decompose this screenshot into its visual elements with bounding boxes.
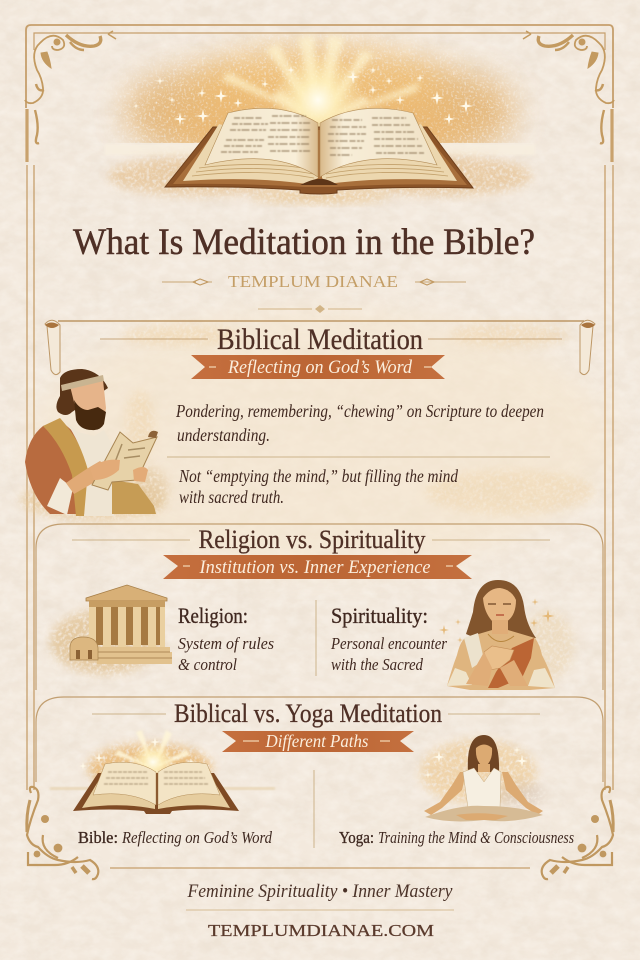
corner ornament: top left xyxy=(25,31,116,143)
title: What Is Meditation in the Bible? xyxy=(73,222,535,263)
scroll xyxy=(92,432,157,490)
body text xyxy=(175,401,544,507)
hair xyxy=(466,580,536,640)
head xyxy=(56,369,108,415)
corner ornament: bottom left xyxy=(27,787,98,879)
robe xyxy=(25,420,155,514)
illustration: temple xyxy=(50,585,172,674)
panel: biblical meditation xyxy=(20,320,595,520)
column: spirituality: with the Sacred xyxy=(331,655,423,674)
body text: Pondering, remembering, “chewing” on Scripture to deepen xyxy=(175,401,544,421)
divider ornament xyxy=(258,305,362,313)
body xyxy=(447,630,555,690)
column: religion: & control xyxy=(178,655,237,674)
panel: biblical vs yoga meditation xyxy=(36,697,603,848)
column: spirituality: Personal encounter xyxy=(330,634,447,653)
website: TEMPLUMDIANAE.COM xyxy=(208,921,434,940)
hero illustration: glowing open book xyxy=(105,36,535,203)
ribbon: Reflecting on God’s Word xyxy=(227,357,412,378)
label: bible: Reflecting on God’s Word xyxy=(121,828,273,847)
label: yoga: Training the Mind & Consciousness xyxy=(378,828,574,847)
body text: Not “emptying the mind,” but filling the mind xyxy=(178,466,459,486)
corner ornament: top right xyxy=(523,31,614,143)
column: religion: Religion: xyxy=(178,603,248,628)
label: yoga: Yoga: xyxy=(339,828,374,847)
subtitle with flourishes xyxy=(162,272,466,291)
tagline: Feminine Spirituality • Inner Mastery xyxy=(187,881,453,902)
heading: Biblical vs. Yoga Meditation xyxy=(174,699,442,728)
scroll header xyxy=(45,320,595,375)
face xyxy=(483,588,516,623)
hands xyxy=(90,460,148,482)
panel: religion vs spirituality xyxy=(36,524,603,690)
body text: with sacred truth. xyxy=(179,487,284,507)
illustration: man reading a scroll xyxy=(20,369,168,520)
ribbon xyxy=(163,555,472,579)
ribbon: Different Paths xyxy=(265,731,368,751)
column: spirituality: Spirituality: xyxy=(331,603,428,628)
illustration: small open book xyxy=(50,730,275,814)
ribbon: Institution vs. Inner Experience xyxy=(199,557,430,578)
column: religion xyxy=(178,603,274,674)
heading: Religion vs. Spirituality xyxy=(198,525,426,554)
illustration: yoga meditation xyxy=(420,735,544,821)
heading: Biblical Meditation xyxy=(217,323,423,356)
body text: understanding. xyxy=(177,425,270,445)
ribbon xyxy=(222,731,414,752)
subtitle with flourishes: TEMPLUM DIANAE xyxy=(228,272,398,291)
corner ornament: bottom right xyxy=(542,787,613,879)
column: spirituality xyxy=(330,603,447,674)
column: religion: System of rules xyxy=(178,634,274,653)
label: bible: Bible: xyxy=(78,828,118,847)
illustration: woman with hands on heart xyxy=(439,580,574,690)
ribbon xyxy=(191,355,445,379)
hands xyxy=(484,646,514,670)
